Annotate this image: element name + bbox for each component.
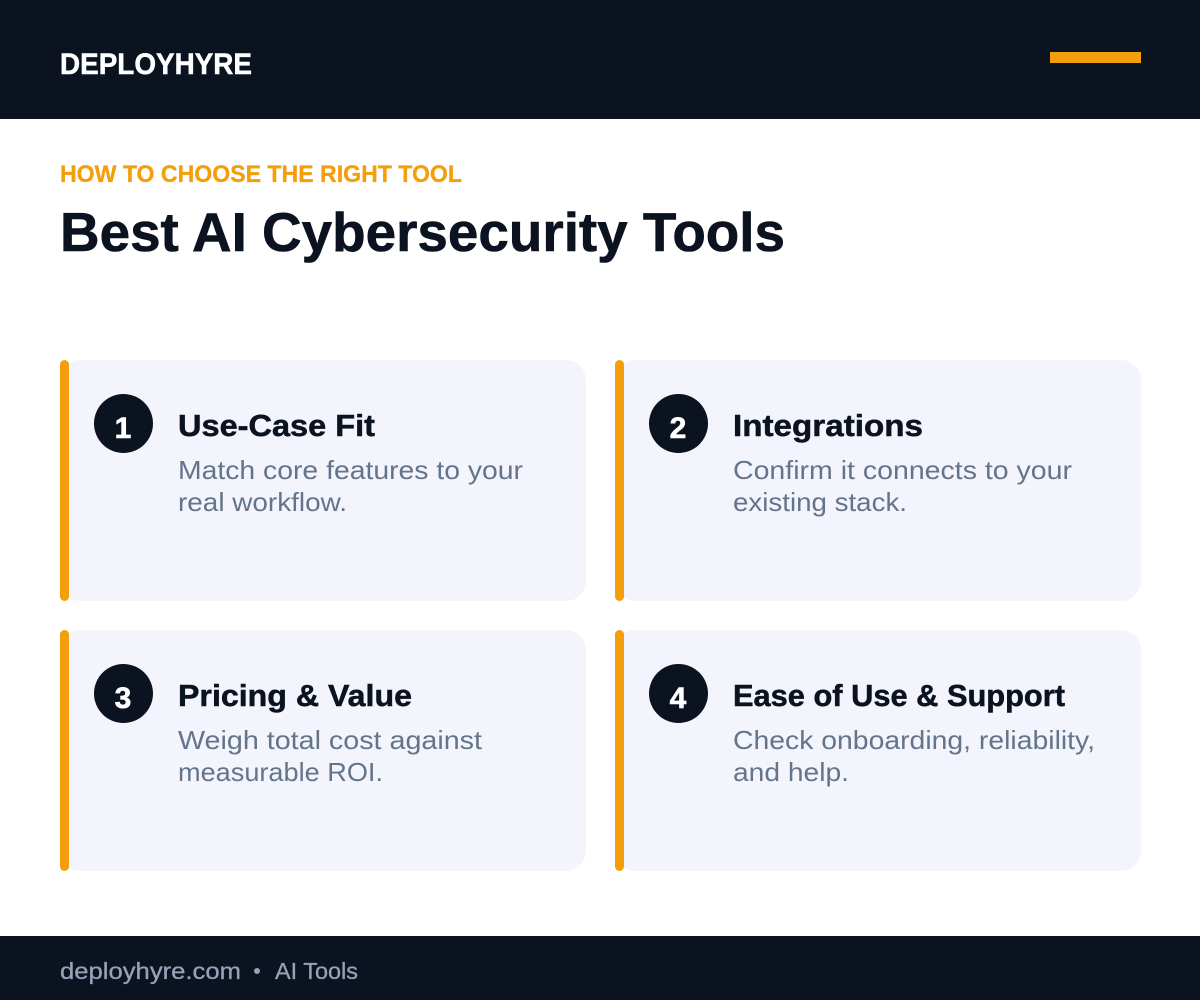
card heading: Pricing & Value (178, 678, 412, 713)
icon: number 1 (94, 394, 153, 453)
footer text: deployhyre.com (60, 958, 241, 984)
eyebrow heading: HOW TO CHOOSE THE RIGHT TOOL (60, 161, 462, 188)
card description: Weigh total cost against (178, 725, 483, 755)
card description: existing stack. (733, 487, 907, 517)
panel: ease of use and support (615, 630, 1141, 871)
icon: number 1: 1 (115, 412, 131, 445)
card description: Confirm it connects to your (733, 455, 1072, 485)
card heading: Use-Case Fit (178, 408, 375, 443)
icon: number 2: 2 (670, 412, 686, 445)
card description: and help. (733, 757, 849, 787)
icon: number 4: 4 (670, 682, 687, 715)
title: Best AI Cybersecurity Tools (60, 201, 785, 263)
card description: measurable ROI. (178, 757, 383, 787)
card description: Match core features to your (178, 455, 523, 485)
footer text (60, 958, 358, 984)
card heading: Ease of Use & Support (733, 678, 1065, 713)
panel: use-case fit (60, 360, 586, 601)
card description: real workflow. (178, 487, 347, 517)
icon: number 3 (94, 664, 153, 723)
card heading: Integrations (733, 408, 923, 443)
accent bar (1050, 52, 1141, 63)
panel: integrations (615, 360, 1141, 601)
header band (0, 0, 1200, 119)
brand name: DEPLOYHYRE (60, 48, 252, 81)
icon: number 2 (649, 394, 708, 453)
icon: number 4 (649, 664, 708, 723)
card description: Check onboarding, reliability, (733, 725, 1095, 755)
icon: number 3: 3 (115, 682, 131, 715)
panel: pricing and value (60, 630, 586, 871)
footer band (0, 936, 1200, 1000)
footer text: AI Tools (275, 958, 358, 984)
